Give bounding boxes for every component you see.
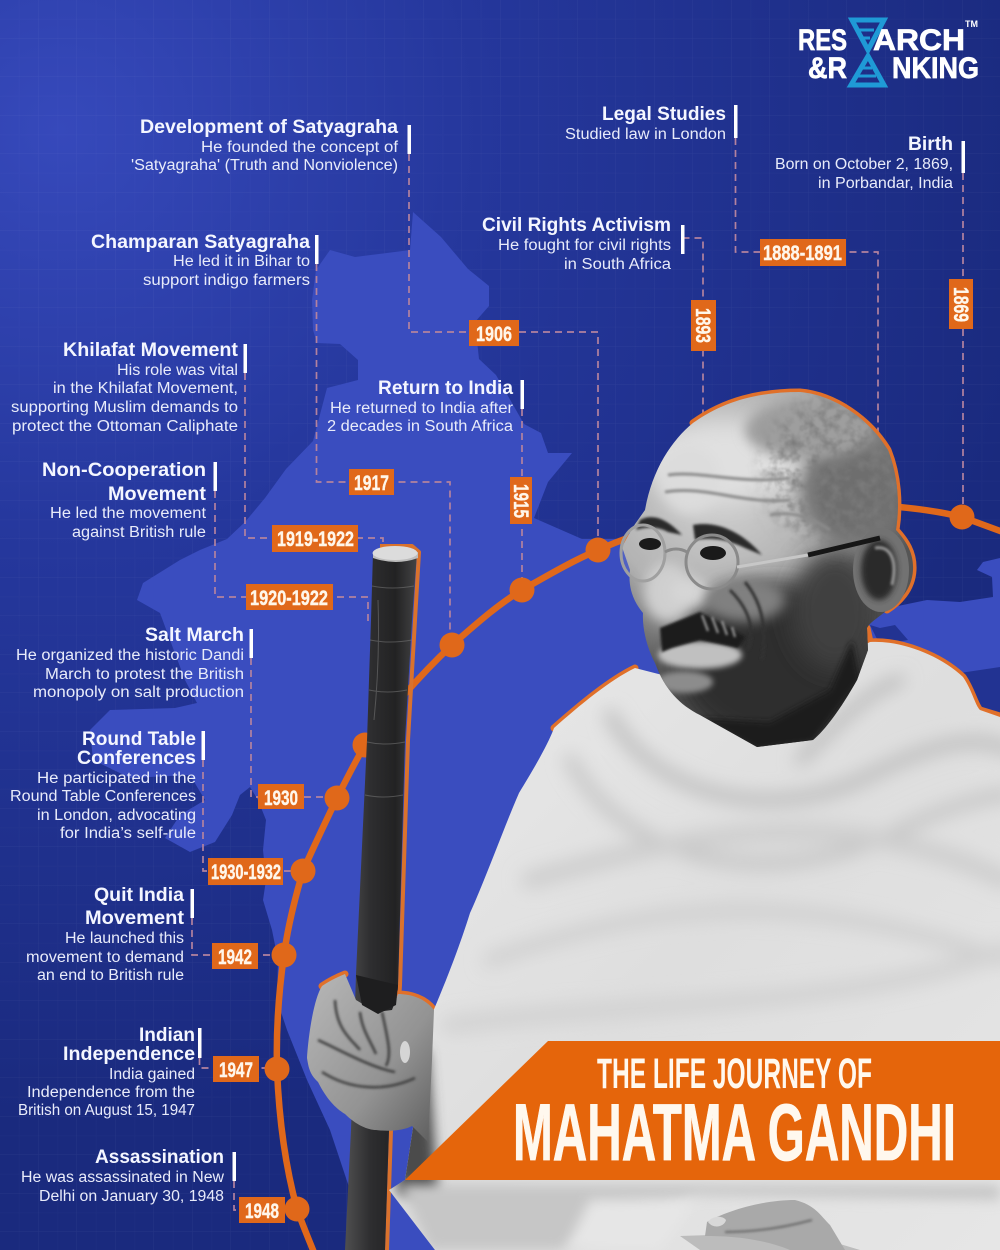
year badges: 1915 bbox=[509, 484, 532, 518]
event: Legal Studies: Legal Studies bbox=[602, 104, 726, 125]
year badges: 1947 bbox=[219, 1059, 253, 1082]
year badges: 1893 bbox=[691, 308, 714, 343]
event: Return to India bbox=[327, 378, 524, 435]
portrait: ear bbox=[853, 528, 909, 612]
portrait: shawl bbox=[380, 640, 1000, 1250]
event: Quit India Movement: movement to demand bbox=[26, 949, 184, 966]
event: Khilafat Movement: supporting Muslim demands to bbox=[11, 399, 238, 416]
event: Non-Cooperation Movement: Movement bbox=[108, 484, 207, 505]
event: Round Table Conferences: for India’s self-rule bbox=[60, 825, 196, 842]
dashed timeline connectors bbox=[192, 138, 963, 1210]
event: Legal Studies bbox=[565, 104, 738, 143]
event: Indian Independence: Independence from the bbox=[27, 1084, 195, 1101]
logo: hourglass mark bbox=[851, 20, 884, 85]
event: Non-Cooperation Movement bbox=[42, 460, 217, 541]
year badges: 1917 bbox=[354, 472, 389, 495]
year badges: 1930-1932 bbox=[211, 861, 281, 884]
title banner bbox=[405, 1041, 1000, 1180]
event: Round Table Conferences: Round Table Conferences bbox=[10, 788, 196, 805]
event: Round Table Conferences: in London, advocating bbox=[37, 807, 196, 824]
event: Round Table Conferences: Round Table bbox=[82, 729, 196, 750]
event: Indian Independence: India gained bbox=[109, 1066, 195, 1083]
logo: Research & Ranking: ARCH bbox=[873, 24, 965, 57]
event: Champaran Satyagraha: support indigo farmers bbox=[143, 272, 310, 289]
event: Indian Independence bbox=[18, 1025, 202, 1119]
event: Civil Rights Activism: in South Africa bbox=[564, 256, 671, 273]
event: Return to India: He returned to India after bbox=[330, 400, 513, 417]
event: Assassination: He was assassinated in New bbox=[21, 1169, 225, 1186]
event: Assassination: Delhi on January 30, 1948 bbox=[39, 1188, 224, 1205]
event: Round Table Conferences bbox=[10, 729, 205, 842]
logo: Research & Ranking: NKING bbox=[892, 52, 979, 85]
event: Civil Rights Activism bbox=[482, 215, 684, 273]
event: Quit India Movement: Quit India bbox=[94, 885, 184, 906]
event: Khilafat Movement bbox=[11, 340, 247, 435]
event: Khilafat Movement: Khilafat Movement bbox=[63, 340, 239, 361]
event: Salt March: He organized the historic Dandi bbox=[16, 647, 244, 664]
event: Salt March: monopoly on salt production bbox=[33, 684, 244, 701]
event: Development of Satyagraha bbox=[131, 117, 411, 174]
event: Birth: Born on October 2, 1869, bbox=[775, 156, 953, 173]
logo: Research & Ranking: &R bbox=[808, 52, 847, 85]
logo: Research & Ranking: RES bbox=[798, 24, 847, 57]
event: Birth: in Porbandar, India bbox=[818, 175, 953, 192]
event: Return to India: 2 decades in South Africa bbox=[327, 418, 513, 435]
event: Indian Independence: British on August 15, 1947 bbox=[18, 1102, 195, 1119]
year badges: 1930 bbox=[264, 787, 298, 810]
Gandhi portrait bbox=[307, 380, 1000, 1250]
logo: Research & Ranking bbox=[798, 19, 979, 85]
event: Assassination bbox=[21, 1147, 236, 1205]
portrait: resting hand bbox=[680, 1200, 860, 1250]
portrait: head and neck bbox=[620, 392, 914, 747]
year badges: 1888-1891 bbox=[763, 242, 842, 265]
year badges: 1948 bbox=[245, 1200, 279, 1223]
event: Round Table Conferences: Conferences bbox=[77, 748, 196, 769]
event: Indian Independence: Indian bbox=[139, 1025, 195, 1046]
event: Khilafat Movement: in the Khilafat Movement, bbox=[53, 380, 238, 397]
event: Champaran Satyagraha: He led it in Bihar to bbox=[173, 253, 310, 270]
event: Quit India Movement: He launched this bbox=[65, 930, 184, 947]
event: Non-Cooperation Movement: against British rule bbox=[72, 524, 206, 541]
logo: Research & Ranking: TM bbox=[965, 19, 978, 29]
event: Non-Cooperation Movement: Non-Cooperation bbox=[42, 460, 206, 481]
event: Civil Rights Activism: He fought for civil rights bbox=[498, 237, 671, 254]
event: Round Table Conferences: He participated in the bbox=[37, 770, 196, 787]
event: Development of Satyagraha: Development of Satyagraha bbox=[140, 117, 398, 138]
event: Quit India Movement bbox=[26, 885, 194, 984]
event: Return to India: Return to India bbox=[378, 378, 513, 399]
event: Champaran Satyagraha: Champaran Satyagraha bbox=[91, 232, 310, 253]
portrait: orange cut-out outlines bbox=[322, 392, 1000, 1010]
event: Champaran Satyagraha bbox=[91, 232, 318, 289]
event: Birth bbox=[775, 134, 965, 192]
year badges bbox=[208, 239, 973, 1223]
map of India bbox=[90, 212, 1000, 1250]
timeline nodes bbox=[264, 504, 974, 1222]
year badges: 1869 bbox=[949, 287, 972, 322]
event: Development of Satyagraha: 'Satyagraha' (Truth and Nonviolence) bbox=[131, 157, 398, 174]
walking staff bbox=[345, 546, 419, 1250]
event: Salt March: March to protest the British bbox=[45, 666, 244, 683]
event: Quit India Movement: an end to British rule bbox=[37, 967, 184, 984]
orange timeline arc bbox=[277, 504, 1000, 1250]
event: Development of Satyagraha: He founded the concept of bbox=[201, 139, 399, 156]
event: Non-Cooperation Movement: He led the movement bbox=[50, 505, 207, 522]
event: Indian Independence: Independence bbox=[63, 1044, 195, 1065]
event: Birth: Birth bbox=[908, 134, 953, 155]
year badges: 1920-1922 bbox=[250, 587, 328, 610]
year badges: 1942 bbox=[218, 946, 252, 969]
event: Khilafat Movement: His role was vital bbox=[117, 362, 238, 379]
event: Quit India Movement: Movement bbox=[85, 908, 185, 929]
portrait: glasses bbox=[621, 525, 880, 589]
year badges: 1906 bbox=[476, 323, 512, 346]
event: Civil Rights Activism: Civil Rights Activism bbox=[482, 215, 671, 236]
event: Legal Studies: Studied law in London bbox=[565, 126, 726, 143]
year badges: 1919-1922 bbox=[277, 528, 354, 551]
event: Khilafat Movement: protect the Ottoman Caliphate bbox=[12, 418, 238, 435]
event: Assassination: Assassination bbox=[95, 1147, 224, 1168]
portrait: staff hand bbox=[307, 974, 434, 1142]
event: Salt March: Salt March bbox=[145, 625, 244, 646]
event: Salt March bbox=[16, 625, 253, 701]
